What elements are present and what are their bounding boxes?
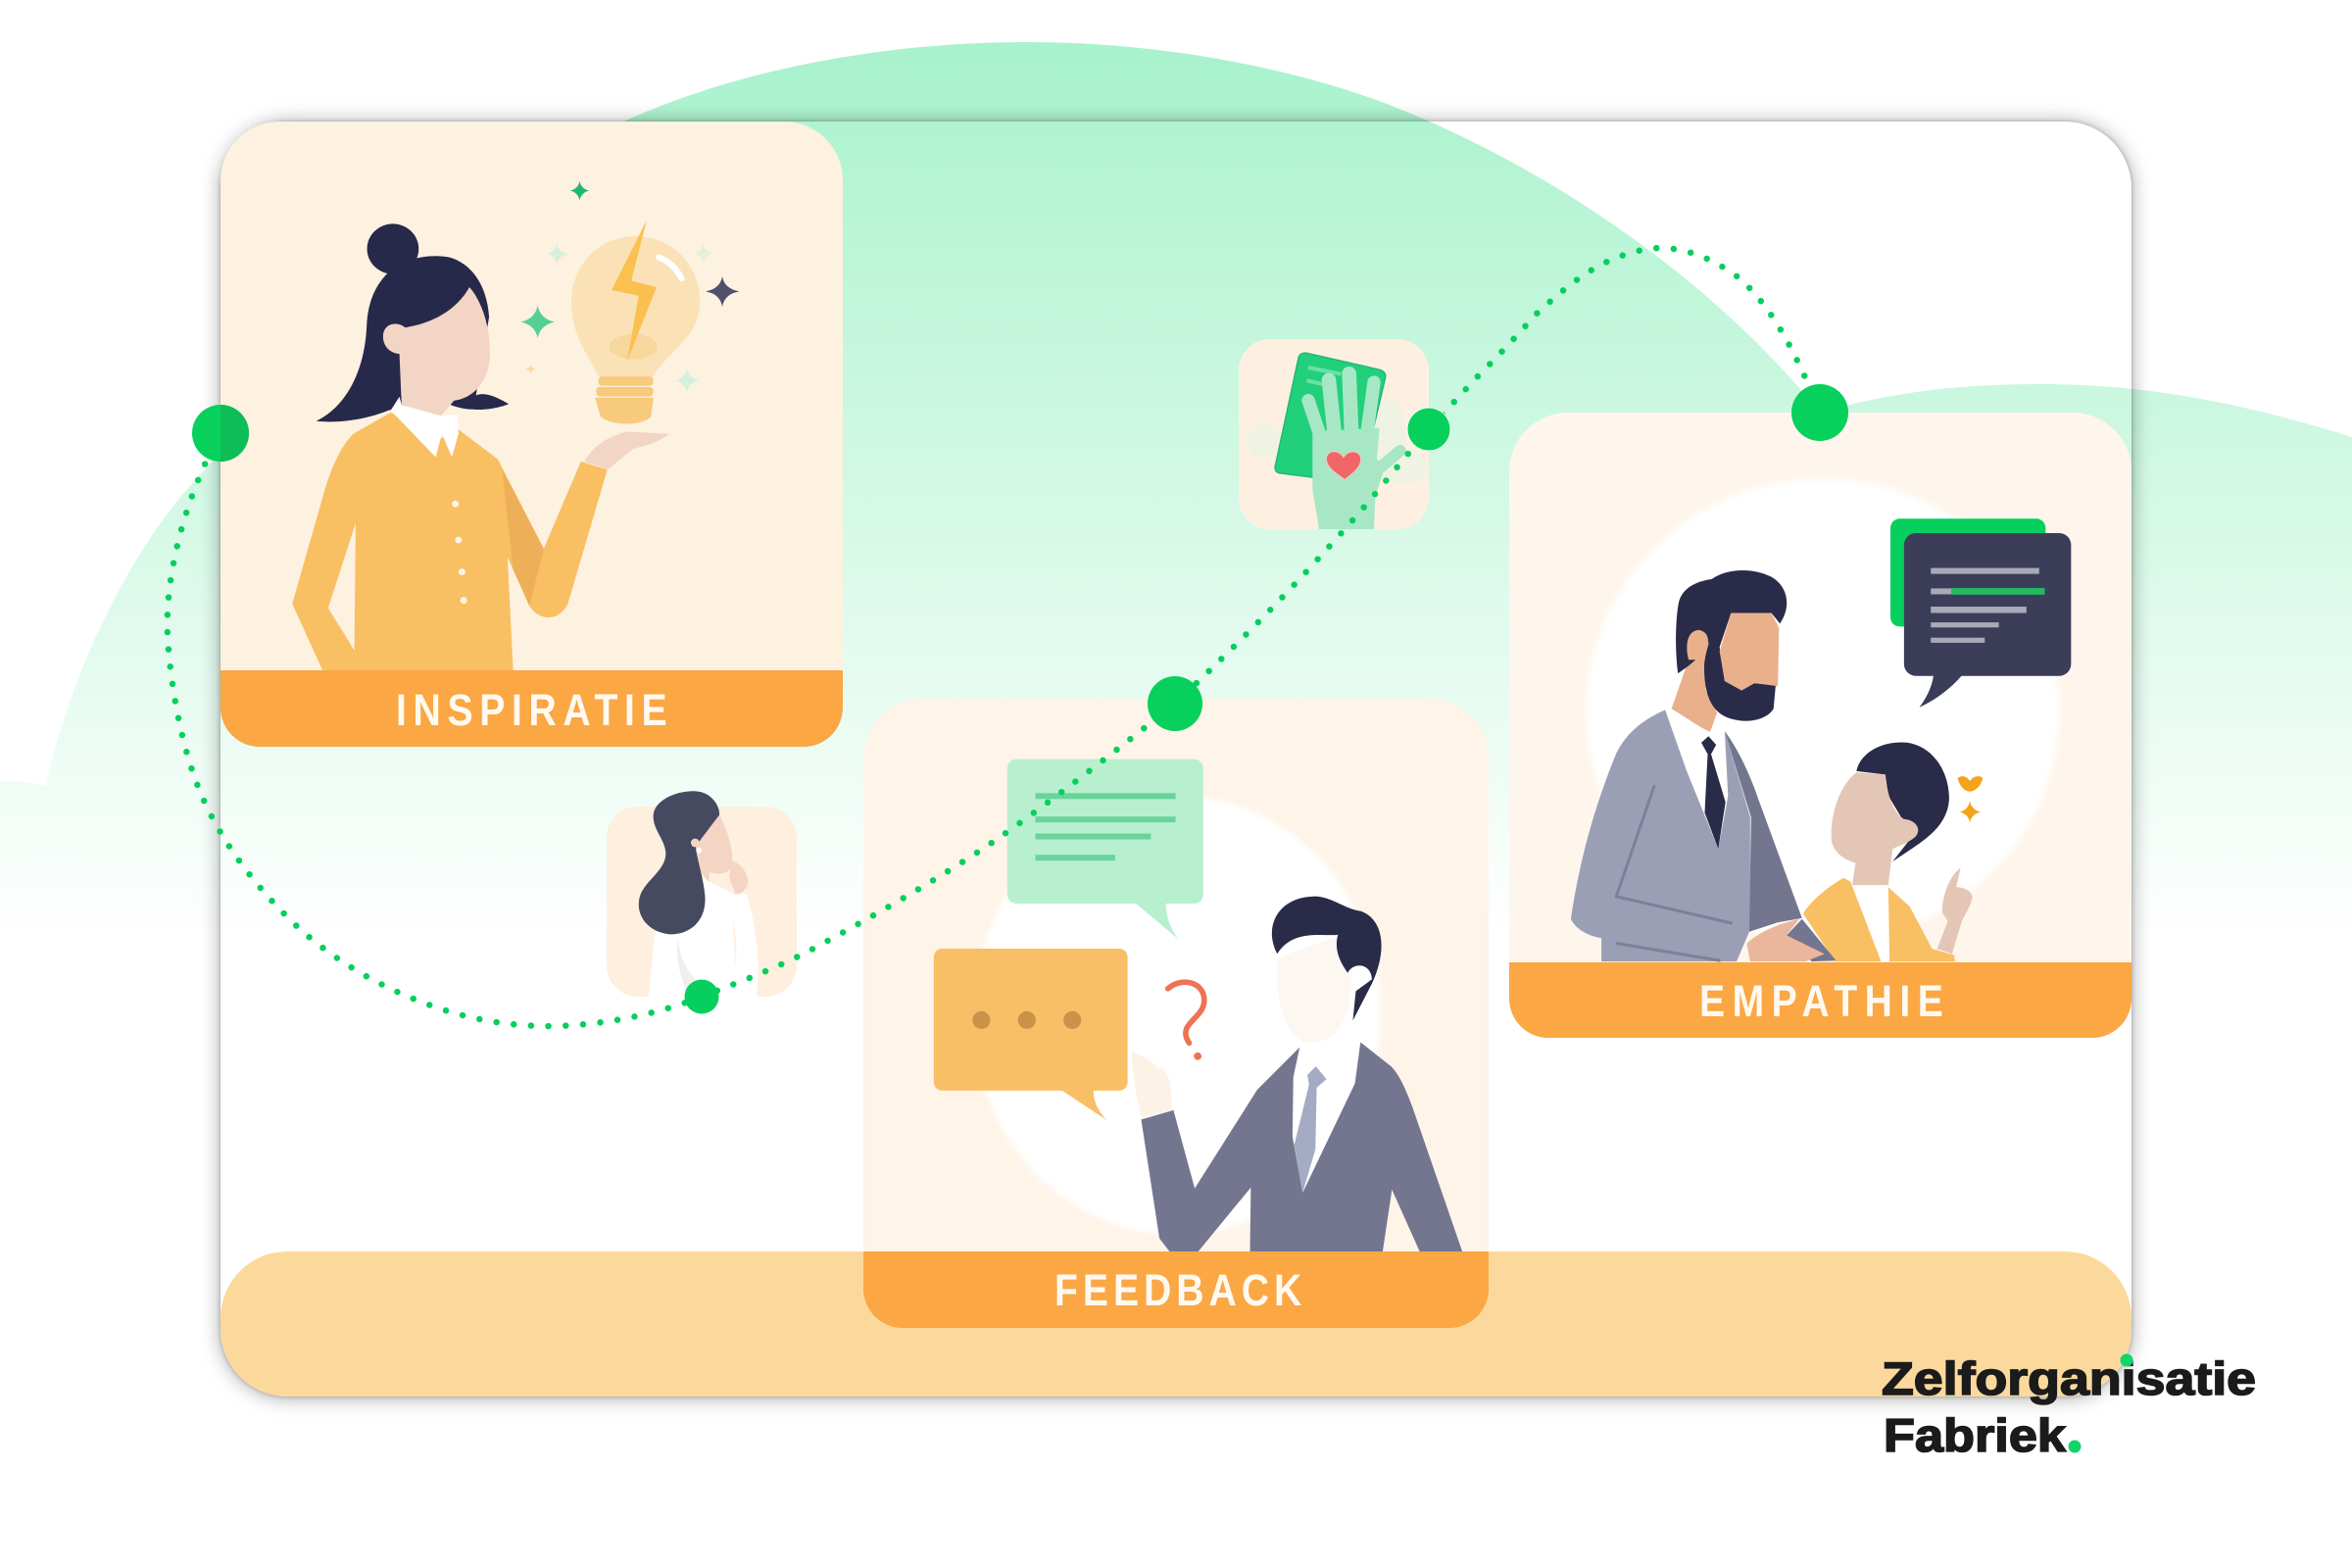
orange speech bubble [934,949,1128,1120]
heart [1326,452,1361,479]
node: empathie [1791,384,1848,441]
woman hand [729,860,748,894]
woman hair [639,791,719,934]
light bulb [571,236,700,376]
panel: empathie [1509,413,2132,1038]
arm crease [732,911,736,965]
bubble lines [1931,568,2039,643]
woman hair [317,223,509,421]
sweater buttons [452,501,467,604]
white circle feedback [973,796,1381,1235]
man face [1277,937,1352,1043]
card background empathie [1509,413,2132,970]
small sparkle [1960,801,1981,822]
illustration: man and child [1571,518,2071,961]
logo word two: Fabriek [1884,1409,2067,1461]
logo word one: Zelforganisatie [1882,1352,2256,1404]
icon card: hand with heart [1239,339,1429,529]
blouse fold [677,938,698,993]
bulb base [595,376,654,423]
green paper [1275,353,1386,483]
node: woman [684,980,719,1013]
node: inspiratie [192,405,249,462]
label feedback: FEEDBACK [1054,1265,1302,1315]
woman face [696,815,732,883]
man hair [1272,897,1382,1020]
adult face [1720,613,1779,690]
panel: feedback [863,699,1489,1328]
band empathie [1509,962,2132,1038]
node: feedback [1148,676,1202,731]
adult sleeve shadow [1725,731,1802,932]
soft blobs [1247,399,1428,485]
woman card background [607,807,797,997]
hand card background [1239,339,1429,529]
man suit [1141,1042,1462,1252]
bulb glow [610,334,658,360]
adult hair and beard [1676,570,1787,721]
woman collar [391,397,459,457]
logo [1882,1352,2256,1461]
adult cuff under hand [1785,919,1836,961]
adult hand [1746,919,1825,961]
white circle empathie [1587,479,2059,942]
man raised hand [1132,1052,1172,1117]
lightning bolt [612,220,657,362]
illustration: man with speech bubbles [934,760,1462,1252]
card background feedback [863,699,1489,1259]
earring [696,848,702,854]
suit fold lines [1616,785,1733,960]
main panel shadow [220,122,2132,1396]
adult shirt [1666,710,1729,849]
bottom band [220,1251,2132,1396]
sparkles [520,181,739,392]
adult tie [1701,736,1726,849]
gap between arm and body [328,523,356,651]
child raised hand [1937,868,1973,954]
man tie [1295,1066,1327,1193]
man shirt [1293,1042,1360,1193]
logo dot on i [2121,1354,2132,1366]
bulb highlight [659,258,682,278]
woman blouse [649,877,759,997]
bubble text lines [1035,793,1176,860]
icon card: thinking woman [607,791,797,997]
sweater sleeve shadow [502,469,544,606]
child face [1832,772,1918,885]
adult neck and ear [1672,632,1717,733]
paper lines [1306,368,1341,384]
ear [691,839,700,847]
adult ear [1687,630,1708,660]
woman sweater [292,413,608,671]
node: hand [1407,408,1450,451]
green speech bubble [1007,760,1203,939]
woman face [383,287,490,416]
dotted connector path [168,248,1820,1026]
band feedback [863,1251,1489,1328]
logo period dot [2068,1441,2082,1452]
hand [1308,373,1400,529]
band inspiratie [220,670,843,747]
child hair [1856,743,1949,861]
child jacket [1803,878,1955,961]
question mark [1168,982,1204,1060]
label empathie: EMPATHIE [1699,976,1943,1026]
panel: inspiratie [220,122,843,747]
dark speech bubbles [1890,518,2071,708]
child shirt [1850,881,1892,961]
adult suit [1571,710,1750,961]
label inspiratie: INSPIRATIE [396,685,667,735]
illustration: woman with light bulb [292,181,739,671]
card background inspiratie [220,122,843,676]
woman hand [584,431,669,469]
small heart [1958,776,1983,792]
